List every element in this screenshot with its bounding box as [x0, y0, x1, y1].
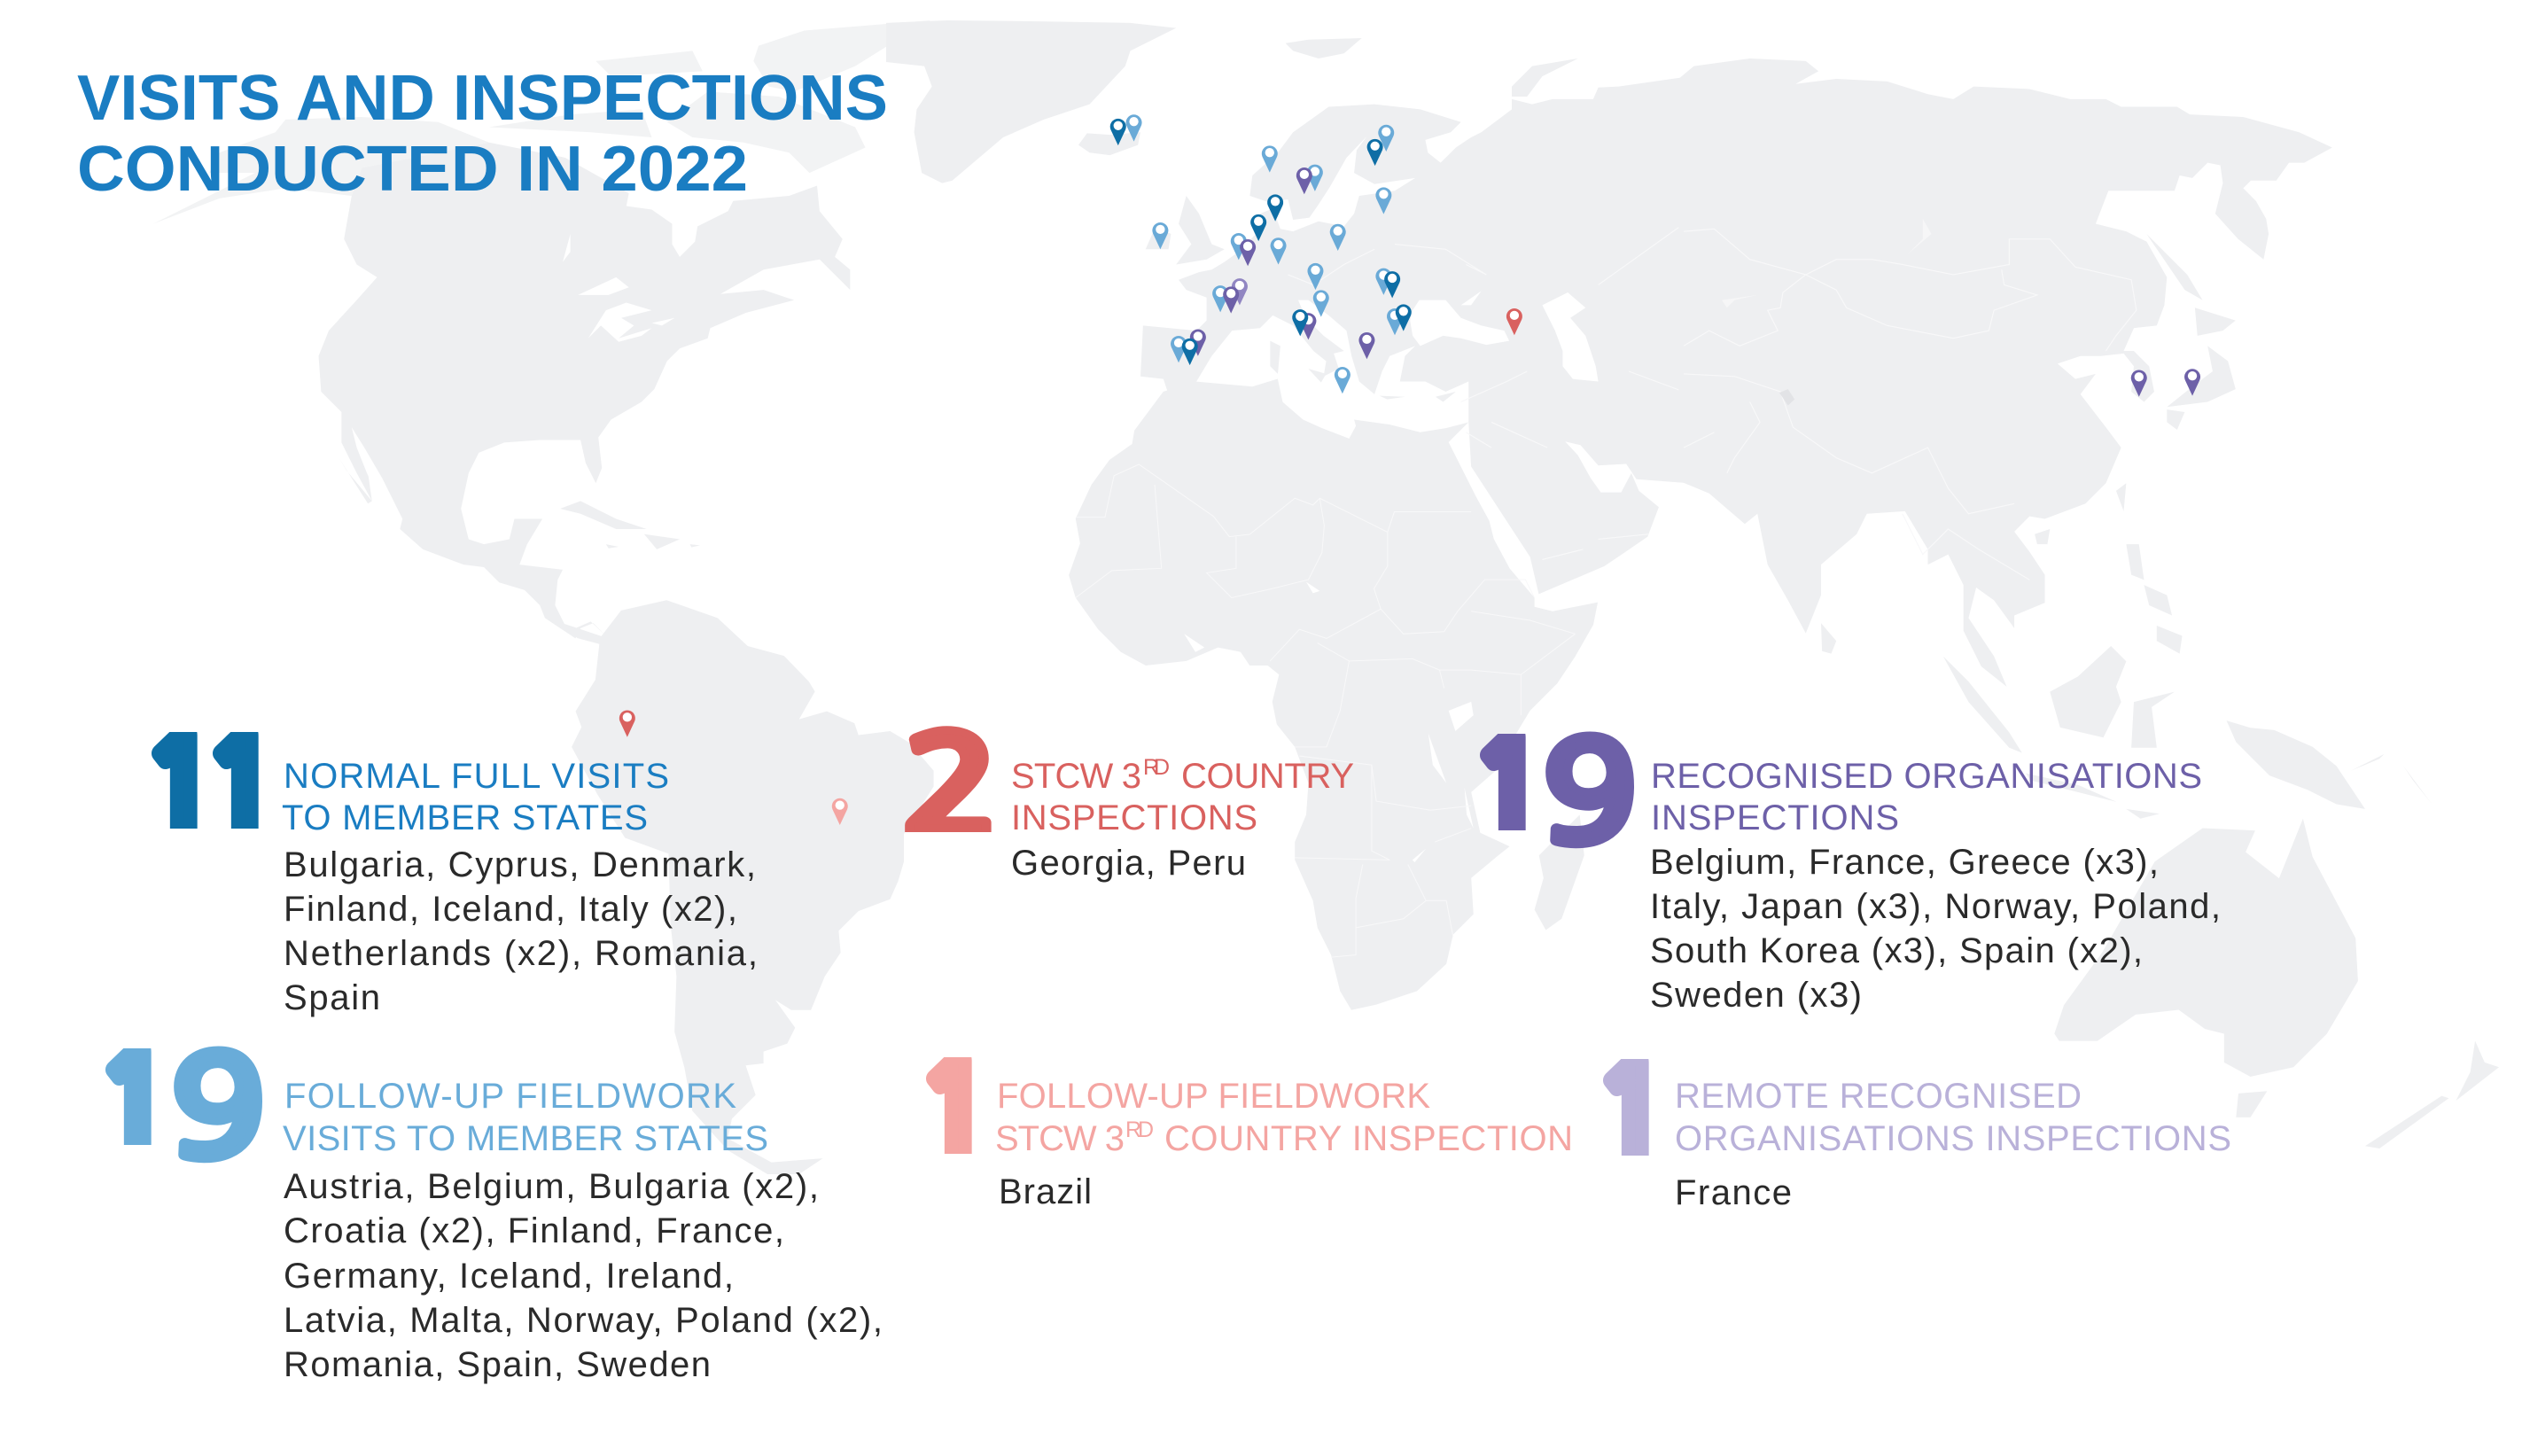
map pin: follow-up STCW inspection — [832, 798, 848, 825]
arctic islands of Canada — [489, 20, 930, 173]
country list: Bulgaria, Cyprus, Denmark, — [284, 845, 756, 884]
world map background — [153, 20, 2499, 1174]
african borders — [1076, 464, 1576, 957]
panel: follow-up STCW inspection — [926, 1057, 1570, 1203]
western asia borders — [1288, 224, 1684, 559]
caribbean islands — [560, 501, 700, 549]
great lakes — [563, 234, 674, 342]
heading: RD — [1125, 1117, 1154, 1142]
heading — [1675, 1077, 2231, 1158]
heading — [1011, 755, 1354, 837]
heading: NORMAL FULL VISITS — [284, 757, 669, 796]
number 19: 9 — [169, 1039, 267, 1179]
african lakes — [1184, 582, 1474, 862]
country list: Finland, Iceland, Italy (x2), — [284, 890, 737, 929]
tasmania and new zealand — [2236, 1041, 2499, 1148]
title — [77, 63, 888, 205]
heading: REMOTE RECOGNISED — [1675, 1077, 2082, 1116]
country list — [1650, 843, 2221, 1015]
panel: recognised organisations inspections — [1470, 722, 2221, 1015]
heading: INSPECTIONS — [1651, 798, 1899, 837]
country list: Latvia, Malta, Norway, Poland (x2), — [284, 1301, 883, 1340]
heading — [1651, 757, 2202, 837]
heading: INSPECTIONS — [1011, 798, 1257, 837]
heading: RECOGNISED ORGANISATIONS — [1651, 757, 2202, 796]
number 2: 2 — [900, 720, 1001, 854]
country list — [284, 845, 758, 1017]
map pins: normal full visits — [1110, 119, 1412, 365]
black sea — [1410, 291, 1509, 346]
country list: France — [1675, 1173, 1792, 1212]
map pins: recognised organisations inspections — [1190, 167, 2200, 397]
title: VISITS AND INSPECTIONS — [77, 63, 888, 134]
map pin: remote recognised organisation inspection — [1232, 278, 1248, 305]
country list: Italy, Japan (x3), Norway, Poland, — [1650, 887, 2221, 926]
number 11: 1 — [142, 720, 220, 854]
indonesian islands — [2026, 754, 2432, 819]
map pins: follow-up fieldwork visits — [1126, 114, 1403, 393]
number 11: 1 — [203, 720, 281, 854]
heading: RD — [1143, 755, 1170, 780]
asian borders — [1684, 229, 2137, 580]
landmass: North and Central America — [153, 20, 930, 638]
heading: TO MEMBER STATES — [282, 798, 648, 837]
heading: COUNTRY — [1181, 757, 1354, 796]
landmass: Greenland, Iceland and Arctic islands — [886, 20, 1690, 594]
landmass: northern and eastern Asia — [1678, 58, 2332, 753]
caspian sea — [1542, 292, 1599, 381]
heading: FOLLOW-UP FIELDWORK — [284, 1077, 736, 1116]
panel: normal full visits — [142, 720, 758, 1017]
country list: Spain — [284, 978, 380, 1017]
heading: COUNTRY INSPECTION — [1164, 1119, 1573, 1158]
title: CONDUCTED IN 2022 — [77, 134, 748, 205]
heading: ORGANISATIONS INSPECTIONS — [1675, 1119, 2231, 1158]
heading — [282, 757, 669, 837]
number 19: 1 — [1470, 722, 1548, 856]
country list: Netherlands (x2), Romania, — [284, 934, 758, 973]
heading: STCW 3 — [1011, 757, 1141, 796]
country list: Belgium, France, Greece (x3), — [1650, 843, 2159, 882]
country list: Brazil — [999, 1172, 1092, 1211]
heading — [995, 1077, 1573, 1158]
landmass: Europe and western Asia — [1140, 76, 1690, 594]
country list: Germany, Iceland, Ireland, — [284, 1257, 734, 1296]
country list: South Korea (x3), Spain (x2), — [1650, 931, 2143, 970]
landmass: Africa — [1069, 379, 1598, 1010]
number 1: 1 — [1593, 1047, 1671, 1181]
map pins: STCW third country inspections — [619, 308, 1522, 737]
heading: FOLLOW-UP FIELDWORK — [997, 1077, 1430, 1116]
alaska — [153, 117, 489, 224]
country list: Romania, Spain, Sweden — [284, 1345, 711, 1384]
heading: STCW 3 — [995, 1119, 1125, 1158]
country list — [284, 1167, 883, 1384]
number 19 — [1480, 732, 1634, 849]
country list: Georgia, Peru — [1011, 844, 1246, 883]
number 19 — [105, 1046, 262, 1163]
number 19: 9 — [1541, 725, 1639, 864]
panel: STCW third country inspections — [900, 720, 1354, 883]
country list: Sweden (x3) — [1650, 976, 1862, 1015]
japan and pacific islands — [1821, 234, 2236, 753]
mediterranean islands — [1255, 341, 1456, 401]
papua new guinea — [2227, 720, 2365, 809]
number 1: 1 — [916, 1046, 994, 1180]
panel: follow-up fieldwork visits — [96, 1037, 883, 1384]
landmass: Australia and Oceania — [2026, 720, 2499, 1148]
number 11 — [152, 732, 259, 829]
country list: Croatia (x2), Finland, France, — [284, 1211, 784, 1250]
country list: Austria, Belgium, Bulgaria (x2), — [284, 1167, 819, 1206]
madagascar — [1535, 814, 1584, 930]
lake baikal — [1722, 219, 1932, 308]
number 19: 1 — [96, 1037, 174, 1171]
heading: VISITS TO MEMBER STATES — [283, 1119, 768, 1158]
landmass: South America — [554, 600, 934, 1174]
heading — [283, 1077, 768, 1158]
landmass: Britain and Ireland — [1146, 196, 1225, 264]
panel: remote recognised organisations inspections — [1603, 1059, 2230, 1205]
